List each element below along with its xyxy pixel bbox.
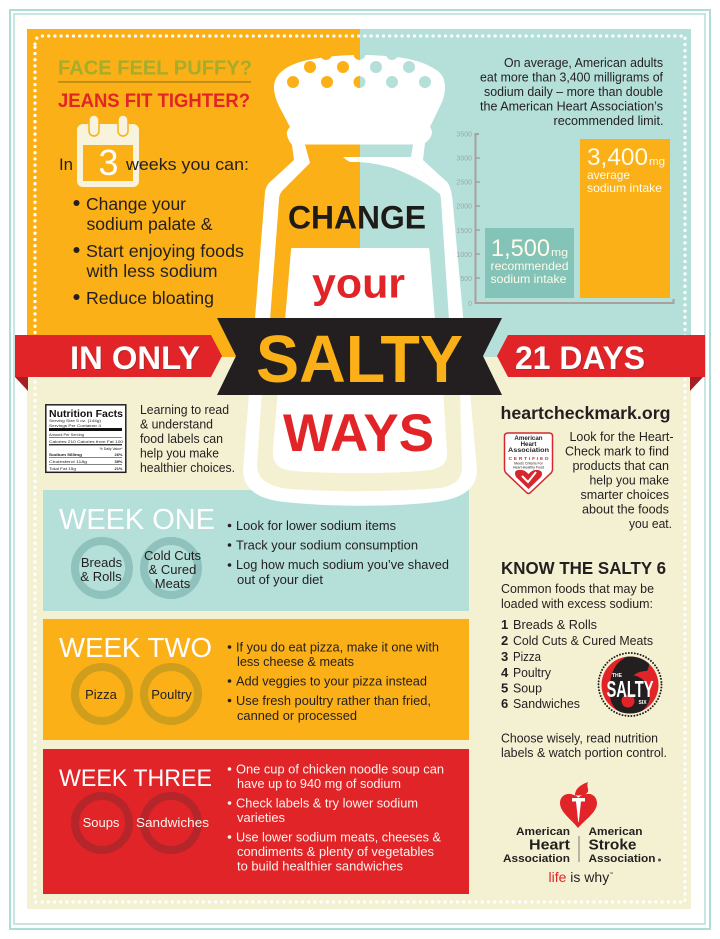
text: heart-check description <box>565 429 674 531</box>
logo: american heart and stroke association: American <box>516 826 570 838</box>
nutrition facts label: Calories 210 Calories from Fat 100 <box>49 439 124 444</box>
ribbon: 21 days: 21 DAYS <box>515 340 645 376</box>
icon: salty six badge <box>598 653 662 716</box>
bar: average: sodium intake <box>587 181 662 195</box>
icon: heart and torch <box>560 782 597 828</box>
chart axis: 2500 <box>456 180 472 186</box>
week one bullets: Look for lower sodium items <box>236 518 396 533</box>
list: salty six foods: Pizza <box>513 649 542 664</box>
list: salty six foods: Cold Cuts & Cured Meats <box>513 633 653 648</box>
food circles: week three: Soups <box>83 815 120 830</box>
week two bullets <box>228 640 439 723</box>
text: heart-check description: products that can <box>572 458 669 473</box>
heading: know the salty 6: KNOW THE SALTY 6 <box>501 558 666 578</box>
tagline: life is why: ™ <box>609 871 613 876</box>
logo: american heart and stroke association: Association <box>588 853 656 865</box>
black banner with SALTY: SALTY <box>256 322 463 397</box>
food circles: week two: Pizza <box>85 687 118 702</box>
icon: salty six badge: THE <box>612 673 623 679</box>
list: salty six foods: 3 <box>501 649 508 664</box>
logo: american heart and stroke association: Stroke <box>588 836 636 854</box>
food circles: week one: & Rolls <box>80 569 122 584</box>
nutrition facts label: Nutrition Facts <box>49 408 123 420</box>
tagline: life is why: life is why <box>548 869 609 885</box>
nutrition facts label: 39% <box>114 459 123 464</box>
text: choose wisely: Choose wisely, read nutrition <box>501 730 658 746</box>
text: american sodium intake: recommended limit. <box>554 113 664 128</box>
bar: recommended: recommended <box>490 259 568 273</box>
week three bullets: to build healthier sandwiches <box>237 858 403 874</box>
bar: recommended <box>485 228 574 298</box>
nutrition facts label: Total Fat 15g <box>49 466 76 471</box>
nutrition facts label: Sodium 560mg <box>49 452 83 457</box>
logo: american heart and stroke association: Heart <box>529 836 570 854</box>
food circles: week two <box>75 667 198 721</box>
week two bullets: Add veggies to your pizza instead <box>236 674 427 688</box>
panel: week three <box>43 749 469 894</box>
chart axis: 3000 <box>456 156 472 162</box>
nutrition facts label: Serving Size 5 oz. (144g) <box>49 418 102 423</box>
list: salty six foods: 5 <box>501 680 508 696</box>
week three bullets: have up to 940 mg of sodium <box>237 776 401 791</box>
text: choose wisely <box>501 730 667 760</box>
text: food labels: help you make <box>140 446 219 460</box>
text: american sodium intake: the American Heart Association’s <box>480 98 663 114</box>
food circles: week three <box>75 796 210 850</box>
heading: heartcheckmark.org: heartcheckmark.org <box>500 403 670 423</box>
logo: american heart and stroke association <box>503 782 661 885</box>
week three bullets: One cup of chicken noodle soup can <box>236 762 444 776</box>
list: salty six foods: Soup <box>513 680 542 696</box>
chart axis: 500 <box>460 276 472 283</box>
bar: average <box>580 139 670 298</box>
list: three week benefits: with less sodium <box>85 261 218 281</box>
list: salty six foods: Poultry <box>513 665 551 680</box>
text: american sodium intake <box>480 55 664 128</box>
text: food labels: food labels can <box>140 431 223 446</box>
icon: heart-check badge: American <box>514 435 543 442</box>
week one heading: WEEK ONE <box>59 504 215 536</box>
week one bullets: out of your diet <box>237 572 323 587</box>
title: ways: WAYS <box>283 404 434 463</box>
ribbon: 21 days <box>497 335 705 391</box>
icon: heart-check badge: Heart <box>521 441 536 448</box>
week three bullets: condiments & plenty of vegetables <box>237 844 434 859</box>
text: heart-check description: Check mark to find <box>565 444 669 458</box>
text: in 3 weeks <box>59 155 249 174</box>
bar: recommended: 1,500 <box>491 235 550 262</box>
text: choose wisely: labels & watch portion control. <box>501 745 667 760</box>
bar: average: mg <box>649 156 665 168</box>
icon: heart-check badge <box>504 433 552 494</box>
ribbon: in only <box>15 335 222 391</box>
title: change: CHANGE <box>288 200 426 236</box>
list: three week benefits: Start enjoying foods <box>86 241 244 261</box>
week three bullets <box>228 762 444 874</box>
panel: week one <box>43 490 469 611</box>
bar: recommended: sodium intake <box>490 272 567 286</box>
chart axis: 1000 <box>456 252 472 259</box>
food circles: week one: & Cured <box>149 562 196 577</box>
week two bullets: canned or processed <box>237 708 357 723</box>
heading: face feel puffy: FACE FEEL PUFFY? <box>58 58 252 80</box>
text: food labels: Learning to read <box>140 402 229 417</box>
icon: heart-check badge: CERTIFIED <box>508 456 549 462</box>
text: food labels: & understand <box>140 416 213 432</box>
bar: recommended: mg <box>551 247 568 259</box>
ribbon: in only: IN ONLY <box>70 340 200 376</box>
chart axis: 3500 <box>456 132 472 138</box>
text: in 3 weeks: weeks you can: <box>125 155 249 174</box>
text: heart-check description: about the foods <box>582 502 669 516</box>
list: salty six foods: Sandwiches <box>513 696 580 711</box>
text: heart-check description: you eat. <box>629 516 672 531</box>
chart axis: 2000 <box>456 204 472 210</box>
salt shaker illustration <box>243 48 477 506</box>
nutrition facts label: 26% <box>114 452 123 457</box>
heading: jeans fit tighter: JEANS FIT TIGHTER? <box>58 90 250 112</box>
list: salty six foods: 2 <box>501 633 508 648</box>
food circles: week three: Sandwiches <box>136 815 210 830</box>
list: three week benefits: Reduce bloating <box>86 288 214 308</box>
chart axis <box>456 132 674 308</box>
bar chart: sodium intake <box>456 132 674 308</box>
icon: heart-check badge: Association <box>508 447 549 454</box>
list: salty six foods <box>501 617 653 711</box>
list: salty six foods: Breads & Rolls <box>513 617 597 632</box>
nutrition facts label <box>46 405 126 472</box>
food circles: week one: Cold Cuts <box>144 548 202 563</box>
text: common foods <box>501 581 654 611</box>
nutrition facts label: % Daily Value* <box>100 447 123 451</box>
nutrition facts label: Amount Per Serving <box>49 433 84 437</box>
week three bullets: Check labels & try lower sodium <box>236 796 418 810</box>
week three bullets: Use lower sodium meats, cheeses & <box>236 830 441 844</box>
text: heart-check description: help you make <box>590 472 669 488</box>
text: heart-check description: Look for the Heart- <box>570 429 674 444</box>
week one bullets <box>228 518 449 587</box>
text: common foods: Common foods that may be <box>501 581 654 596</box>
chart axis: 1500 <box>456 228 472 235</box>
title: your: your <box>312 260 405 306</box>
list: salty six foods: 4 <box>501 665 509 680</box>
text: heart-check description: smarter choices <box>580 487 669 502</box>
logo: american heart and stroke association: Association <box>503 853 570 865</box>
chart axis: 0 <box>468 301 472 308</box>
list: salty six foods: 1 <box>501 617 508 632</box>
list: three week benefits <box>74 194 244 308</box>
week two bullets: If you do eat pizza, make it one with <box>236 640 439 654</box>
list: three week benefits: sodium palate & <box>86 214 213 234</box>
bar: average: average <box>587 168 630 182</box>
text: food labels <box>140 402 235 475</box>
text: in 3 weeks: In <box>59 155 73 174</box>
week three heading: WEEK THREE <box>59 765 212 792</box>
nutrition facts label: 21% <box>114 466 123 471</box>
week one bullets: Log how much sodium you’ve shaved <box>236 557 449 572</box>
icon: calendar: 3 <box>98 142 119 183</box>
nutrition facts label: Cholesterol 118g <box>49 459 87 464</box>
icon: heart-check badge: Heart-Healthy Food <box>513 466 544 470</box>
week one bullets: Track your sodium consumption <box>236 538 418 552</box>
food circles: week one: Breads <box>81 555 123 570</box>
food circles: week one <box>75 541 202 595</box>
week two bullets: Use fresh poultry rather than fried, <box>236 693 431 708</box>
text: common foods: loaded with excess sodium: <box>501 596 653 611</box>
text: food labels: healthier choices. <box>140 460 235 475</box>
week two heading: WEEK TWO <box>59 632 212 663</box>
food circles: week two: Poultry <box>151 687 192 702</box>
week two bullets: less cheese & meats <box>237 654 354 669</box>
text: american sodium intake: On average, American adults <box>504 55 663 70</box>
food circles: week one: Meats <box>155 576 191 591</box>
text: american sodium intake: sodium daily – more than double <box>484 84 663 99</box>
list: salty six foods: 6 <box>501 696 508 711</box>
bar: average: 3,400 <box>587 144 648 171</box>
icon: calendar <box>77 115 139 187</box>
icon: salty six badge: SIX <box>638 700 647 706</box>
logo: american heart and stroke association: American <box>588 826 643 838</box>
text: american sodium intake: eat more than 3,400 milligrams of <box>480 70 663 84</box>
week three bullets: varieties <box>237 810 285 825</box>
panel: week two <box>43 619 469 740</box>
list: three week benefits: Change your <box>86 194 186 214</box>
icon: salty six badge: SALTY <box>606 676 654 702</box>
nutrition facts label: Servings Per Container 4 <box>49 423 102 428</box>
icon: heart-check badge: Meets Criteria For <box>514 462 544 466</box>
